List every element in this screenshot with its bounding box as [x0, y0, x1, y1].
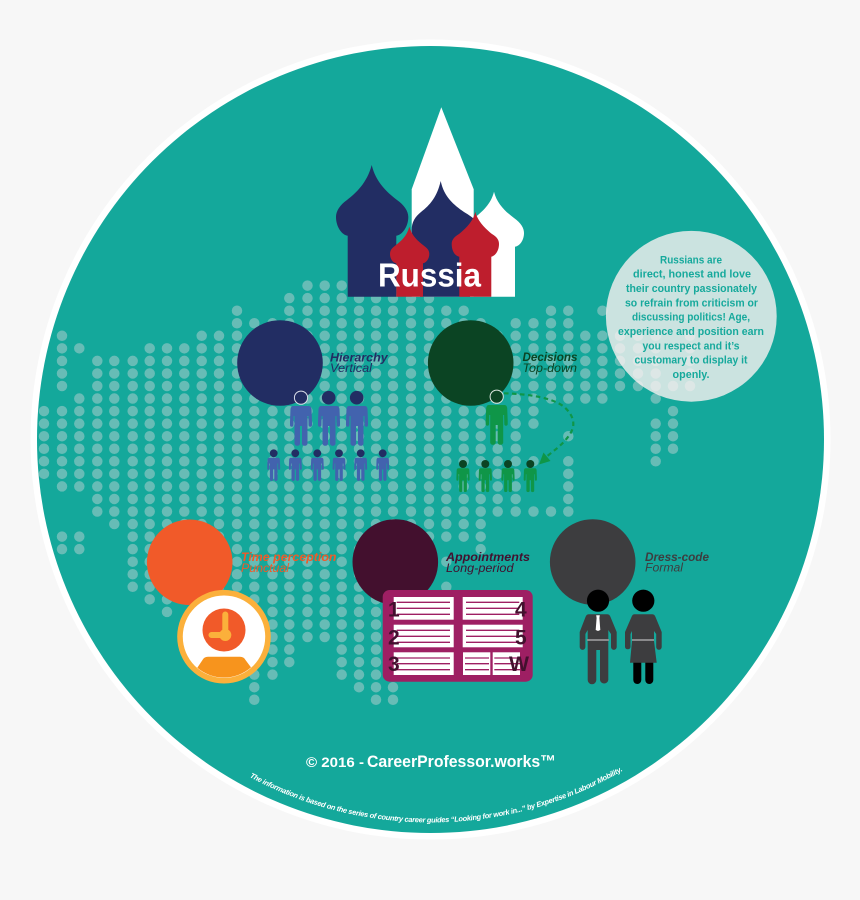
decisions label: Top-down	[522, 361, 577, 375]
copyright line: © 2016 -	[306, 754, 364, 770]
hierarchy circle	[237, 320, 323, 406]
icon: man in suit	[580, 590, 617, 684]
appointments label	[445, 550, 530, 575]
icon: planner	[383, 590, 533, 682]
appointments label: Appointments	[445, 550, 530, 564]
dress-code label	[645, 550, 709, 574]
panel: dress-code	[550, 519, 709, 684]
callout text: experience and position earn	[618, 326, 764, 338]
icon: team members	[456, 460, 537, 492]
planner numbers: W	[509, 653, 529, 676]
callout text: discussing politics! Age,	[632, 312, 750, 324]
icon: decision maker	[486, 390, 508, 445]
appointments circle	[352, 519, 438, 605]
callout bubble	[606, 231, 777, 402]
time circle	[147, 520, 232, 605]
panel: hierarchy	[237, 320, 389, 481]
decisions label	[522, 350, 578, 375]
hierarchy label: Vertical	[330, 361, 372, 375]
planner numbers: 3	[388, 653, 400, 676]
callout text: their country passionately	[626, 283, 757, 295]
icon: Russian cathedral domes	[336, 107, 524, 297]
callout text: direct, honest and love	[633, 269, 751, 281]
dress-code label: Dress-code	[645, 550, 709, 564]
callout text	[618, 254, 764, 381]
icon: woman in skirt	[625, 590, 662, 684]
time label: Time perception	[241, 550, 336, 564]
icon: clock and person	[177, 590, 271, 684]
panel: decisions	[428, 320, 578, 492]
callout text: openly.	[672, 369, 710, 381]
callout text: customary to display it	[634, 355, 748, 367]
callout text: you respect and it’s	[642, 340, 740, 352]
panel: appointments	[352, 519, 533, 682]
dotted map of Russia	[44, 286, 690, 700]
icon: senior people	[290, 391, 368, 446]
time label	[241, 550, 336, 575]
decisions circle	[428, 320, 514, 406]
icon: junior people	[267, 449, 389, 481]
planner numbers: 5	[515, 626, 527, 649]
dress-code label: Formal	[645, 560, 683, 574]
title: Russia	[378, 258, 481, 295]
time label: Punctual	[241, 561, 289, 575]
hierarchy label: Hierarchy	[330, 350, 389, 364]
dress-code circle	[550, 519, 636, 605]
appointments label: Long-period	[446, 561, 514, 575]
decisions label: Decisions	[522, 350, 578, 364]
planner numbers: 4	[515, 599, 527, 622]
hierarchy label	[330, 350, 389, 375]
planner numbers	[388, 599, 529, 676]
arrow: top-down dashed	[504, 393, 573, 464]
panel: time perception	[147, 520, 336, 684]
callout text: so refrain from criticism or	[625, 297, 759, 309]
copyright line: CareerProfessor.works™	[367, 752, 556, 771]
curved source note: The information is based on the series of country career guides “Looking for work in...” by Expertise in Labour Mobility.	[250, 768, 622, 824]
callout text: Russians are	[660, 254, 722, 266]
planner numbers: 2	[388, 626, 400, 649]
planner numbers: 1	[388, 599, 400, 622]
